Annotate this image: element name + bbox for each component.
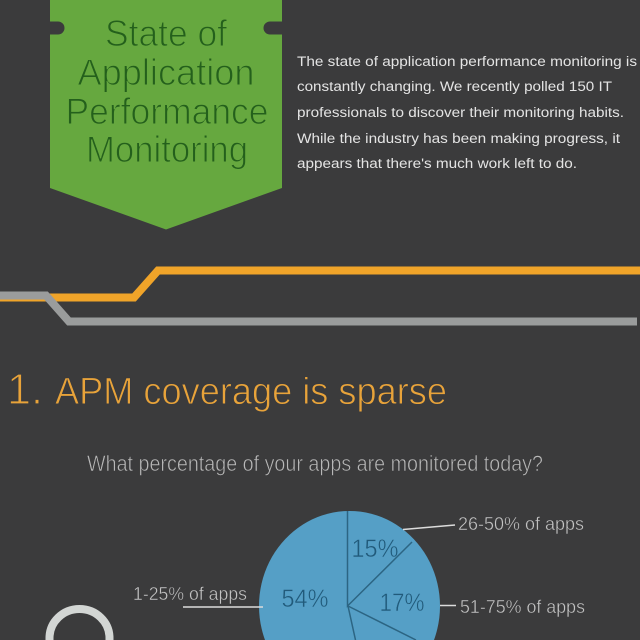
intro paragraph: constantly changing. We recently polled 150 IT bbox=[297, 79, 612, 95]
title text: Monitoring bbox=[86, 129, 248, 170]
title text: Application bbox=[78, 52, 254, 93]
pie value labels: 17% bbox=[380, 589, 424, 617]
section heading: 1. bbox=[7, 365, 43, 414]
pie value labels: 54% bbox=[282, 585, 328, 613]
pie value labels: 15% bbox=[352, 535, 398, 563]
intro paragraph: professionals to discover their monitoring habits. bbox=[297, 105, 624, 121]
pie chart bbox=[259, 511, 440, 640]
title text: State of bbox=[105, 13, 228, 54]
section heading: APM coverage is sparse bbox=[55, 371, 447, 413]
intro paragraph: appears that there's much work left to do. bbox=[297, 156, 577, 172]
title text bbox=[66, 13, 268, 170]
pie callout labels: 51-75% of apps bbox=[460, 596, 585, 617]
orange divider line bbox=[0, 270, 640, 298]
pie callout labels: 1-25% of apps bbox=[133, 583, 247, 604]
intro paragraph: The state of application performance monitoring is bbox=[297, 54, 637, 70]
pie callout labels: 26-50% of apps bbox=[458, 513, 584, 534]
pie value labels bbox=[282, 535, 424, 617]
intro paragraph: While the industry has been making progress, it bbox=[297, 131, 620, 147]
title banner bbox=[50, 0, 282, 230]
intro paragraph bbox=[297, 54, 637, 172]
icon: ring bbox=[50, 609, 110, 640]
pie callout labels bbox=[133, 513, 585, 617]
title text: Performance bbox=[66, 91, 268, 132]
survey question: What percentage of your apps are monitored today? bbox=[87, 451, 543, 476]
grey divider line bbox=[0, 296, 637, 322]
